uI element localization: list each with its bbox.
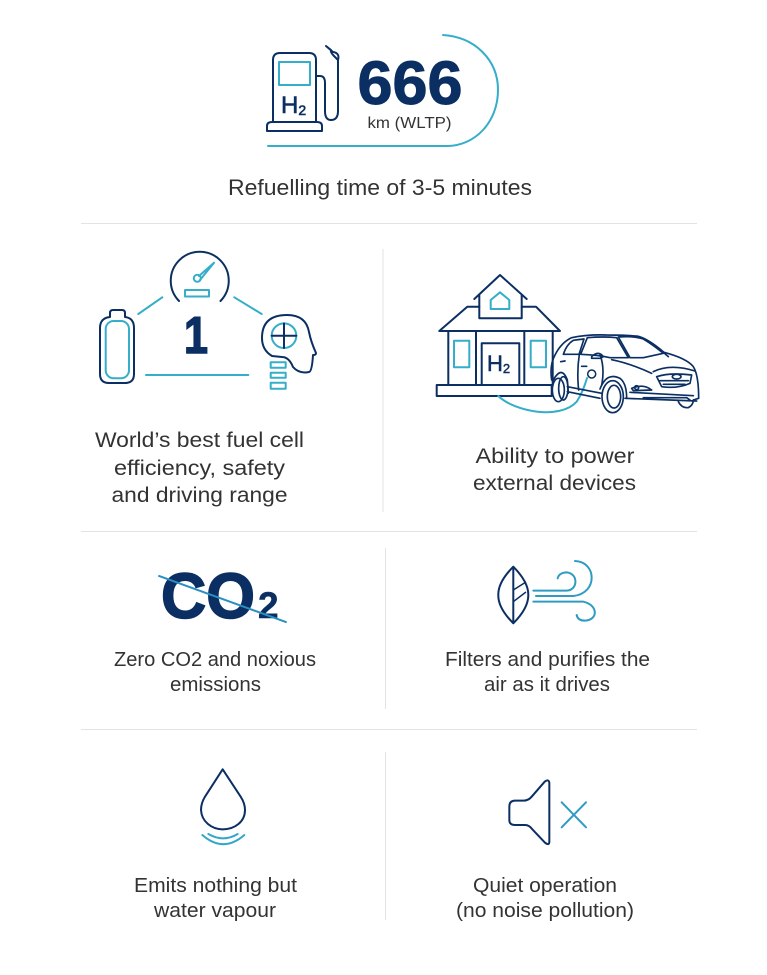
panel: power external devices: [437, 275, 699, 495]
icon: muted speaker: [509, 780, 586, 844]
panel: fuel cell efficiency: [95, 252, 316, 507]
icon: charging cable: [498, 378, 587, 412]
icon: hydrogen pump: [267, 46, 338, 131]
icon: gauge: [171, 252, 229, 301]
text: external power: external devices: [473, 472, 636, 495]
panel: zero emissions: [114, 560, 316, 696]
icon: car: [551, 335, 699, 413]
icon: hydrogen pump: 2: [298, 102, 306, 118]
text: quiet operation: [456, 875, 634, 922]
panel: range header: [267, 35, 498, 146]
text: air purification: Filters and purifies the: [445, 649, 650, 671]
icon: house: 2: [503, 361, 510, 376]
icon: leaf: [498, 567, 528, 623]
text: quiet operation: (no noise pollution): [456, 900, 634, 922]
decorative arc: [268, 35, 498, 146]
icon: house: [437, 275, 560, 396]
text: zero emissions: emissions: [170, 674, 261, 696]
text: external power: [473, 445, 636, 495]
range figure: 666: [358, 49, 462, 117]
heading: refuelling time: Refuelling time of 3-5 minutes: [228, 175, 532, 200]
icon: hydrogen pump: H: [281, 92, 298, 119]
text: fuel cell efficiency: [95, 429, 304, 507]
text: water vapour: [134, 875, 297, 922]
icon: wind: [533, 561, 595, 621]
icon: crossed CO2: CO: [161, 560, 255, 632]
text: external power: Ability to power: [476, 445, 634, 468]
icon: charge port: [588, 370, 596, 378]
text: fuel cell efficiency: and driving range: [112, 484, 288, 507]
text: zero emissions: Zero CO2 and noxious: [114, 649, 316, 671]
icon: head with crosshair: [262, 315, 316, 389]
text: air purification: [445, 649, 650, 696]
text: water vapour: water vapour: [153, 900, 276, 922]
panel: quiet operation: [456, 780, 634, 922]
icon: water drop: [201, 769, 245, 844]
icon: crossed CO2: 2: [258, 585, 279, 626]
text: fuel cell efficiency: World’s best fuel cell: [95, 429, 304, 452]
text: quiet operation: Quiet operation: [473, 875, 617, 897]
text: water vapour: Emits nothing but: [134, 875, 297, 897]
icon: battery: [100, 310, 134, 383]
panel: water vapour: [134, 769, 297, 922]
icon: house: H: [487, 351, 503, 376]
text: air purification: air as it drives: [484, 674, 610, 696]
text: zero emissions: [114, 649, 316, 696]
number one: 1: [184, 307, 208, 365]
range unit: km (WLTP): [368, 115, 452, 132]
icon: connecting lines: [138, 297, 262, 375]
text: fuel cell efficiency: efficiency, safety: [114, 457, 286, 480]
panel: air purification: [445, 561, 650, 696]
